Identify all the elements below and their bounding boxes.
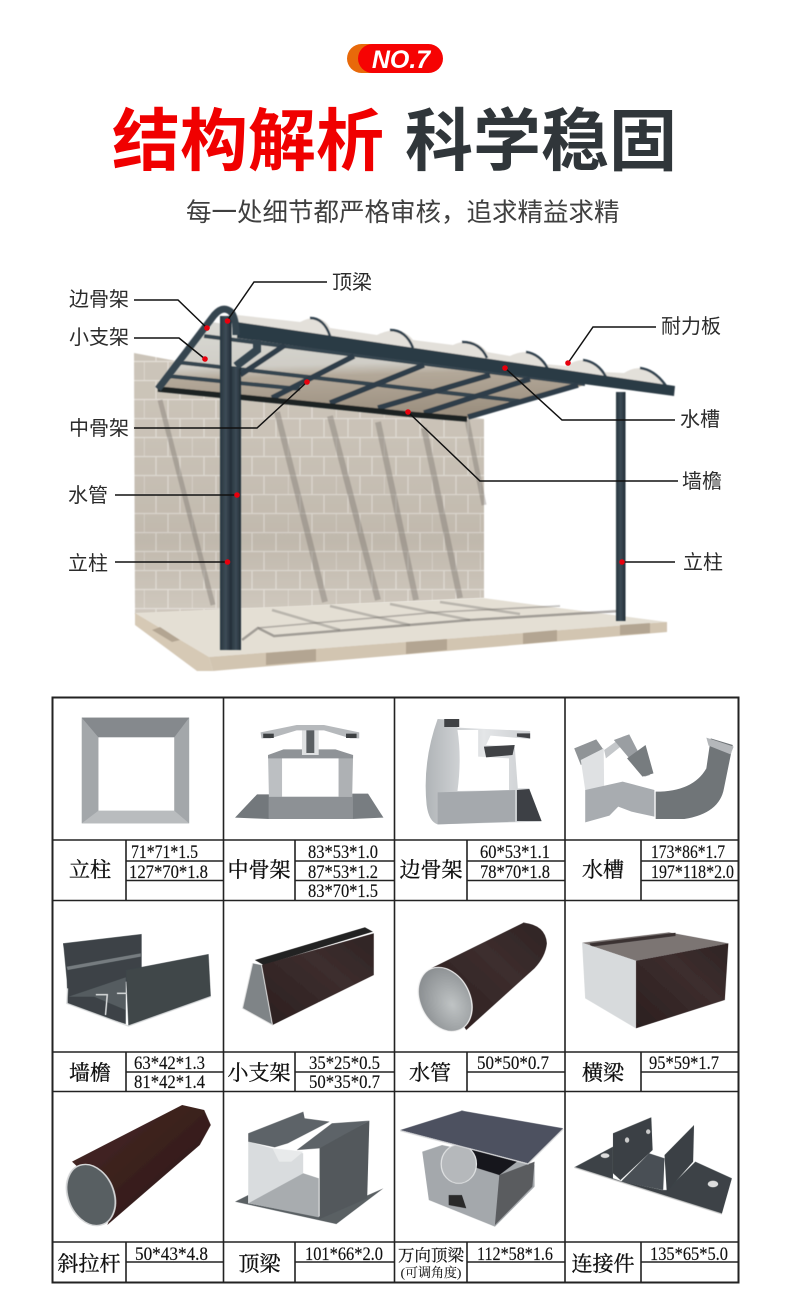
row 1 specs: 83*53*1.0 bbox=[308, 843, 378, 863]
row 3 specs bbox=[58, 1245, 728, 1280]
row 3 specs: (可调角度) bbox=[401, 1265, 461, 1280]
title bbox=[112, 104, 677, 180]
brick wall bbox=[134, 353, 484, 614]
row 1 specs: 197*118*2.0 bbox=[651, 863, 734, 883]
row 1 specs: 173*86*1.7 bbox=[651, 843, 725, 863]
row 1 specs: 78*70*1.8 bbox=[480, 863, 550, 883]
floor bbox=[135, 598, 667, 671]
product: diagonal rod bbox=[60, 1105, 211, 1229]
roof: panel, rafters, beam bbox=[158, 315, 675, 419]
row 2 specs bbox=[69, 1054, 719, 1093]
product: side rafter bbox=[426, 719, 542, 824]
product: middle rafter bbox=[235, 725, 383, 819]
leader lines bbox=[115, 282, 678, 562]
row 1 specs: 水槽 bbox=[582, 858, 624, 882]
spec table bbox=[52, 697, 738, 1282]
row 1 specs: 127*70*1.8 bbox=[129, 863, 208, 883]
row 2 specs: 63*42*1.3 bbox=[134, 1054, 205, 1074]
row 1 specs bbox=[69, 843, 734, 902]
product: wall eave bbox=[63, 934, 211, 1026]
row 2 specs: 50*35*0.7 bbox=[309, 1073, 380, 1093]
callout labels: 边骨架 bbox=[69, 288, 129, 311]
subtitle: 每一处细节都严格审核，追求精益求精 bbox=[186, 199, 620, 227]
row 2 specs: 50*50*0.7 bbox=[477, 1054, 549, 1074]
title: 结构解析 bbox=[112, 104, 384, 180]
callout labels: 水管 bbox=[68, 484, 108, 507]
callout labels: 顶梁 bbox=[332, 271, 372, 294]
row 1 specs: 中骨架 bbox=[228, 858, 290, 882]
product: universal top beam bbox=[400, 1111, 563, 1227]
row 3 products bbox=[60, 1105, 732, 1229]
product: gutter bbox=[574, 734, 734, 822]
row 1 specs: 83*70*1.5 bbox=[308, 882, 378, 902]
badge: NO.7 bbox=[347, 44, 443, 74]
callout labels: 立柱 bbox=[68, 552, 108, 575]
row 1 specs: 边骨架 bbox=[400, 858, 462, 882]
row 2 specs: 小支架 bbox=[228, 1061, 290, 1085]
row 2 specs: 横梁 bbox=[582, 1061, 625, 1085]
row 3 specs: 50*43*4.8 bbox=[135, 1245, 208, 1265]
row 1 specs: 71*71*1.5 bbox=[131, 843, 198, 863]
row 3 specs: 顶梁 bbox=[238, 1252, 281, 1276]
product: cross beam bbox=[582, 932, 728, 1028]
red markers bbox=[202, 318, 625, 565]
row 2 specs: 水管 bbox=[409, 1061, 451, 1085]
row 3 specs: 101*66*2.0 bbox=[305, 1245, 383, 1265]
product: small bracket bbox=[242, 927, 374, 1025]
row 3 specs: 万向顶梁 bbox=[398, 1245, 466, 1265]
row 3 specs: 斜拉杆 bbox=[58, 1252, 120, 1276]
title: 科学稳固 bbox=[405, 104, 677, 180]
row 2 specs: 35*25*0.5 bbox=[309, 1054, 380, 1074]
callout labels: 中骨架 bbox=[69, 417, 129, 440]
row 2 products bbox=[63, 923, 728, 1036]
callout labels: 耐力板 bbox=[661, 315, 721, 338]
product: square post bbox=[82, 718, 189, 823]
structure diagram bbox=[68, 271, 723, 671]
row 3 specs: 135*65*5.0 bbox=[650, 1245, 728, 1265]
badge: NO.7: NO.7 bbox=[372, 46, 431, 74]
row 2 specs: 95*59*1.7 bbox=[649, 1054, 719, 1074]
row 1 products bbox=[82, 718, 734, 824]
water pipe and posts bbox=[158, 309, 626, 650]
callout labels: 水槽 bbox=[680, 408, 720, 431]
row 3 specs: 112*58*1.6 bbox=[477, 1245, 553, 1265]
row 2 specs: 81*42*1.4 bbox=[134, 1073, 205, 1093]
product: connector bbox=[574, 1117, 732, 1214]
row 1 specs: 87*53*1.2 bbox=[308, 863, 378, 883]
callout labels: 小支架 bbox=[69, 326, 129, 349]
table grid bbox=[52, 697, 738, 1282]
row 2 specs: 墙檐 bbox=[69, 1061, 111, 1085]
row 3 specs: 连接件 bbox=[572, 1252, 634, 1276]
callout labels: 墙檐 bbox=[682, 470, 722, 493]
row 1 specs: 60*53*1.1 bbox=[480, 843, 550, 863]
callout labels: 立柱 bbox=[683, 551, 723, 574]
product: water pipe bbox=[410, 923, 547, 1036]
product: top beam bbox=[235, 1112, 383, 1224]
row 1 specs: 立柱 bbox=[69, 858, 111, 882]
callout labels bbox=[68, 271, 723, 575]
